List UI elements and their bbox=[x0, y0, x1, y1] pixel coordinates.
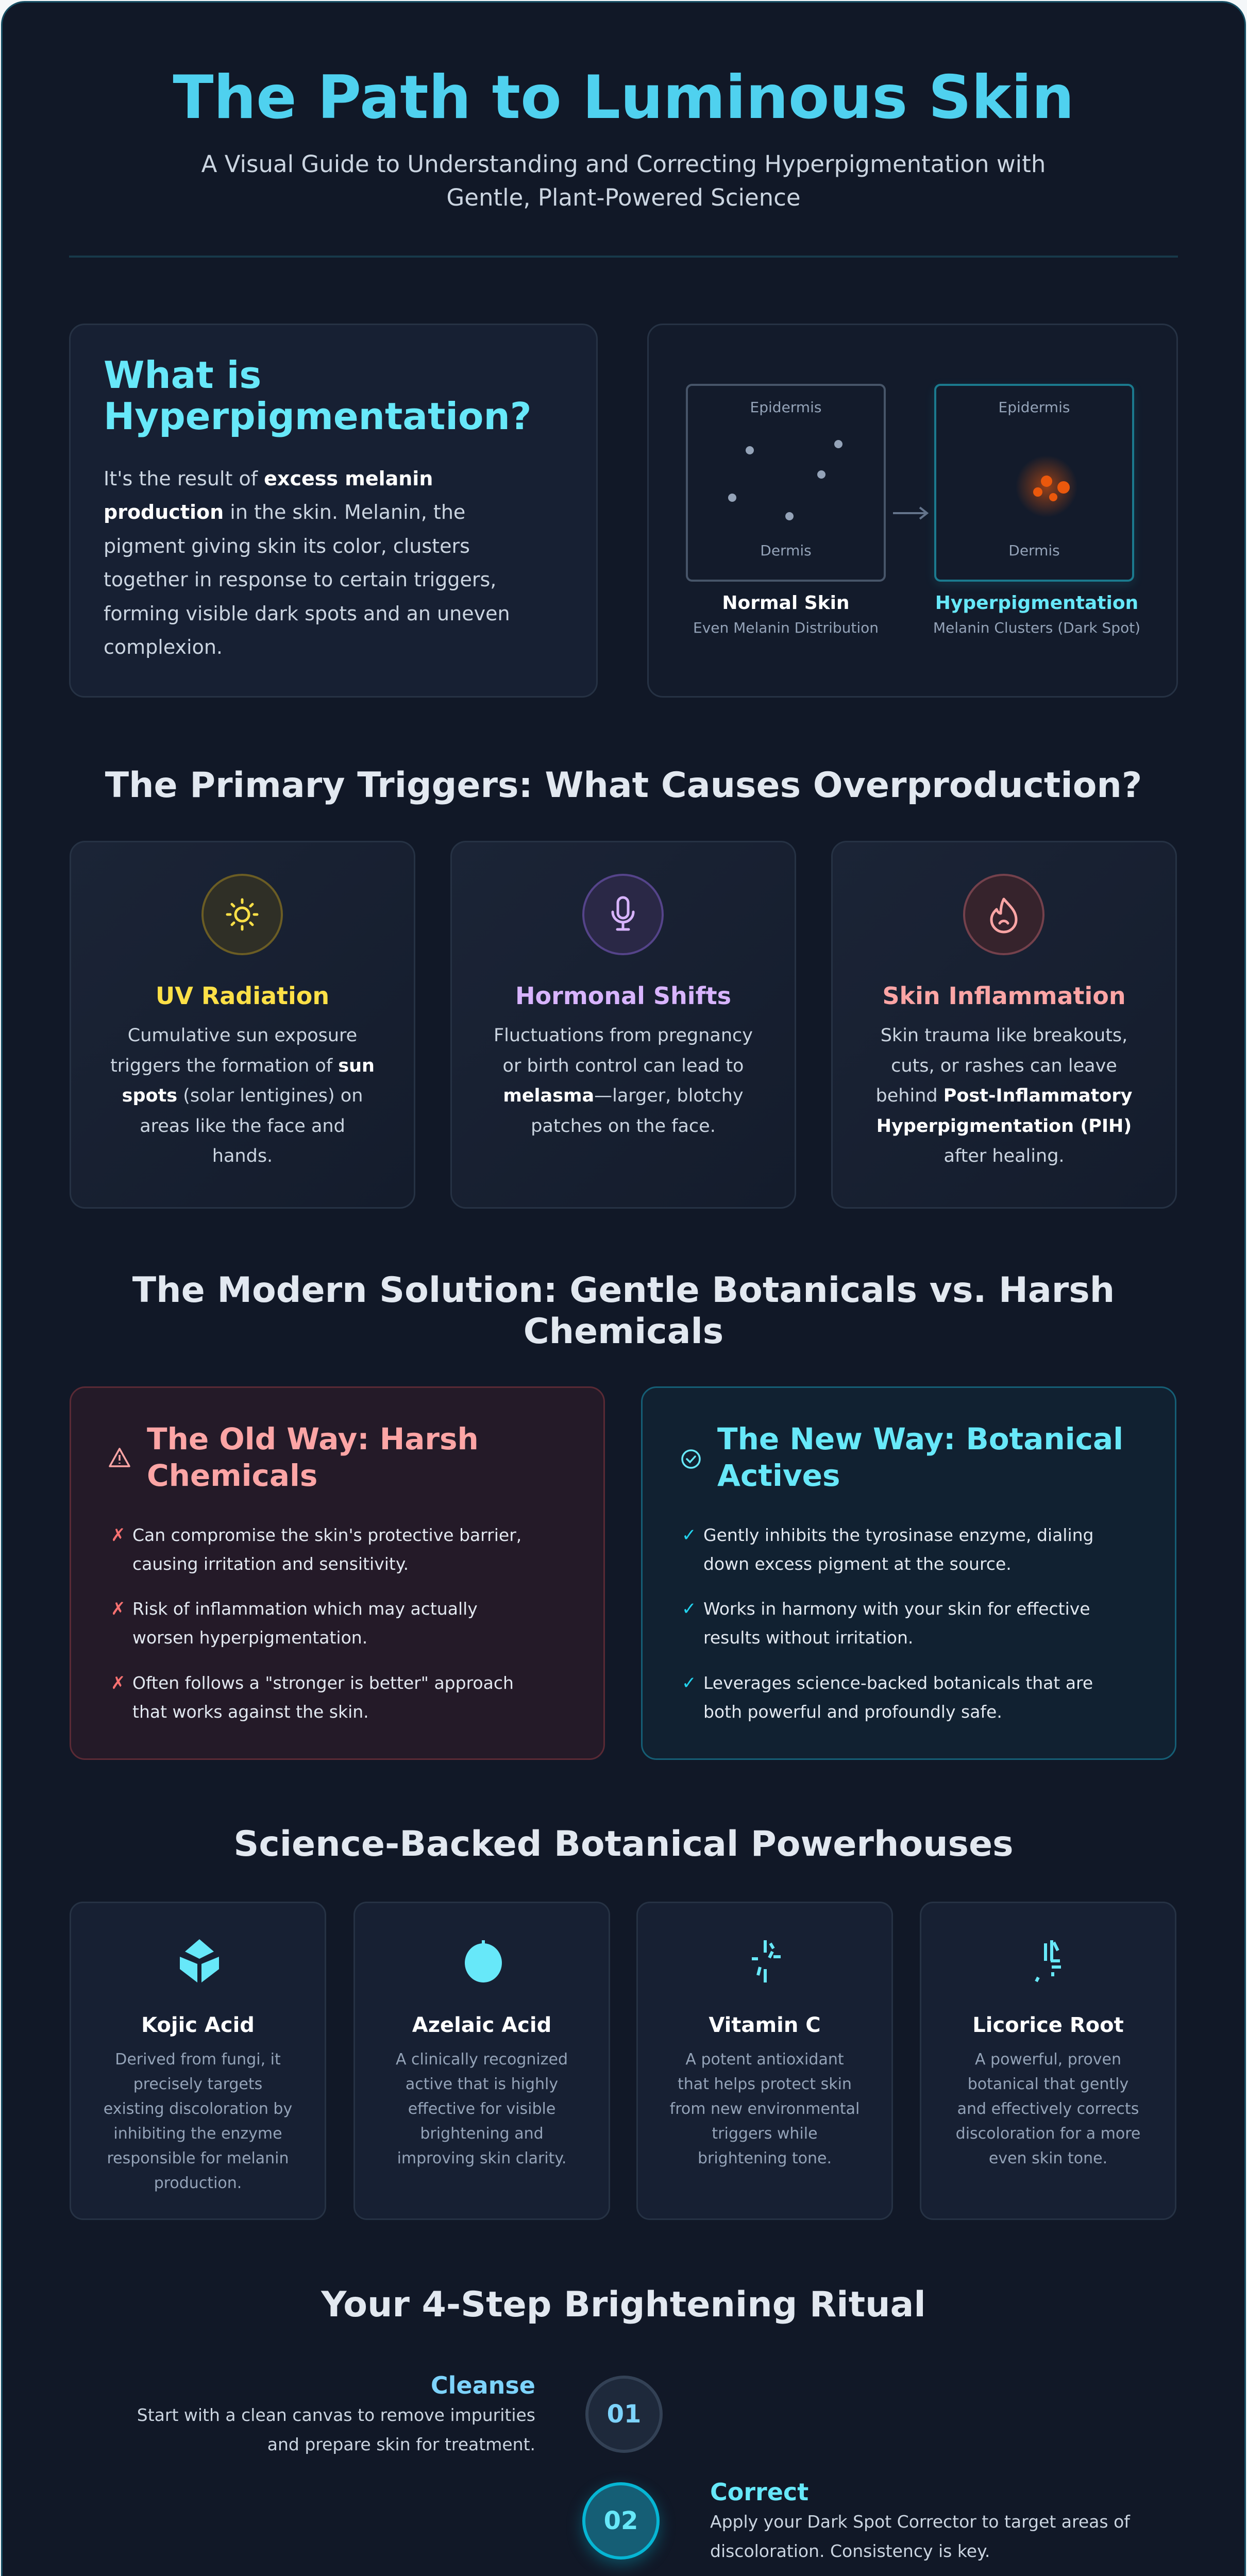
icon: warning bbox=[109, 1448, 130, 1467]
text: precisely targets bbox=[133, 2075, 262, 2093]
text: existing discoloration by bbox=[104, 2100, 292, 2118]
card: azelaic acid bbox=[353, 1902, 610, 2220]
diagram: hyperpigmentation bbox=[934, 384, 1134, 582]
text: melasma—larger, blotchy bbox=[503, 1086, 744, 1106]
bullets: ✗ bbox=[111, 1525, 126, 1546]
subtitle: Gentle, Plant-Powered Science bbox=[446, 184, 801, 211]
subtitle bbox=[201, 150, 1046, 211]
label: hyperpigmentation bbox=[933, 592, 1140, 636]
text bbox=[104, 2050, 292, 2192]
bullets: ✓ bbox=[682, 1599, 697, 1619]
title: UV Radiation bbox=[156, 982, 329, 1010]
bullets: causing irritation and sensitivity. bbox=[132, 1554, 409, 1574]
bullets: Works in harmony with your skin for effective bbox=[703, 1599, 1090, 1619]
icon: microphone bbox=[582, 874, 664, 955]
text: production. bbox=[154, 2174, 242, 2192]
text bbox=[396, 2050, 568, 2167]
bullets: ✓ bbox=[682, 1525, 697, 1546]
heading: botanical powerhouses: Science-Backed Botanical Powerhouses bbox=[233, 1824, 1014, 1865]
label: normal skin: Even Melanin Distribution bbox=[693, 619, 879, 636]
text: triggers the formation of sun bbox=[110, 1056, 375, 1076]
text: A powerful, proven bbox=[975, 2050, 1121, 2069]
icon: sparkle bbox=[752, 1940, 781, 1982]
step 2: correct bbox=[580, 2477, 1177, 2564]
text: definition: production in the skin. Melanin, the bbox=[104, 501, 465, 523]
icon: drop bbox=[465, 1940, 502, 1982]
step 1: cleanse bbox=[52, 2370, 665, 2458]
heading bbox=[147, 1421, 479, 1493]
heading: modern solution: Chemicals bbox=[524, 1311, 723, 1352]
text: active that is highly bbox=[406, 2075, 558, 2093]
text: even skin tone. bbox=[989, 2149, 1107, 2167]
bullets: that works against the skin. bbox=[132, 1702, 369, 1722]
text: effective for visible bbox=[408, 2100, 555, 2118]
text: or birth control can lead to bbox=[503, 1056, 744, 1076]
text: from new environmental bbox=[670, 2100, 860, 2118]
name: Kojic Acid bbox=[141, 2013, 255, 2037]
text: A potent antioxidant bbox=[685, 2050, 844, 2069]
panel: what is hyperpigmentation bbox=[69, 324, 598, 698]
text: areas like the face and bbox=[140, 1116, 345, 1137]
heading: primary triggers: The Primary Triggers: What Causes Overproduction? bbox=[105, 765, 1142, 806]
icon: check circle bbox=[681, 1449, 701, 1469]
label: hyperpigmentation: Hyperpigmentation bbox=[935, 592, 1138, 614]
bullets: Gently inhibits the tyrosinase enzyme, dialing bbox=[703, 1525, 1093, 1545]
text: discoloration for a more bbox=[956, 2125, 1140, 2143]
card: kojic acid bbox=[70, 1902, 326, 2220]
circle 02 bbox=[582, 2482, 660, 2560]
step 1: cleanse: and prepare skin for treatment. bbox=[267, 2434, 535, 2454]
bullets: Leverages science-backed botanicals that are bbox=[703, 1673, 1093, 1693]
diagram: hyperpigmentation: Epidermis bbox=[999, 399, 1070, 416]
title: Hormonal Shifts bbox=[515, 982, 731, 1010]
card: hormonal shifts bbox=[450, 841, 796, 1209]
label: normal skin bbox=[693, 592, 879, 636]
text: Hyperpigmentation (PIH) bbox=[877, 1116, 1132, 1137]
heading: what is: Hyperpigmentation? bbox=[104, 395, 532, 438]
diagram: normal skin: Dermis bbox=[760, 542, 812, 559]
heading: ritual: Your 4-Step Brightening Ritual bbox=[321, 2284, 926, 2325]
step 2: correct: Correct bbox=[710, 2478, 808, 2506]
text bbox=[110, 1025, 375, 1166]
heading bbox=[717, 1421, 1123, 1493]
subtitle: A Visual Guide to Understanding and Correcting Hyperpigmentation with bbox=[201, 150, 1046, 178]
text: definition: complexion. bbox=[104, 636, 223, 658]
bullets: results without irritation. bbox=[703, 1628, 913, 1648]
text bbox=[876, 1025, 1132, 1166]
icon: flame bbox=[963, 874, 1044, 955]
name: Azelaic Acid bbox=[412, 2013, 551, 2037]
text: Fluctuations from pregnancy bbox=[494, 1025, 753, 1046]
text: definition bbox=[104, 467, 510, 658]
heading: what is bbox=[104, 353, 532, 438]
bullets: Risk of inflammation which may actually bbox=[132, 1599, 478, 1619]
label: hyperpigmentation: Melanin Clusters (Dark Spot) bbox=[933, 619, 1140, 636]
panel: skin diagram bbox=[647, 324, 1178, 698]
circle 01: 01 bbox=[607, 2400, 641, 2429]
bullets: ✓ bbox=[682, 1673, 697, 1693]
text: behind Post-Inflammatory bbox=[876, 1086, 1132, 1106]
text: and effectively corrects bbox=[957, 2100, 1139, 2118]
text: Derived from fungi, it bbox=[115, 2050, 281, 2069]
text: improving skin clarity. bbox=[397, 2149, 566, 2167]
circle 02: 02 bbox=[604, 2506, 638, 2535]
text: Cumulative sun exposure bbox=[128, 1025, 357, 1046]
text: that helps protect skin bbox=[678, 2075, 852, 2093]
text: Skin trauma like breakouts, bbox=[881, 1025, 1127, 1046]
panel: new way bbox=[641, 1386, 1176, 1760]
bullets: worsen hyperpigmentation. bbox=[132, 1628, 367, 1648]
text: patches on the face. bbox=[531, 1116, 716, 1137]
text: definition: forming visible dark spots and an uneven bbox=[104, 602, 510, 625]
text: spots (solar lentigines) on bbox=[122, 1086, 363, 1106]
name: Licorice Root bbox=[972, 2013, 1124, 2037]
diagram: normal skin: Epidermis bbox=[750, 399, 821, 416]
text: brightening tone. bbox=[698, 2149, 832, 2167]
heading: Actives bbox=[717, 1458, 840, 1493]
icon: sun bbox=[201, 874, 283, 955]
text bbox=[670, 2050, 860, 2167]
bullets: both powerful and profoundly safe. bbox=[703, 1702, 1002, 1722]
heading: The New Way: Botanical bbox=[717, 1421, 1123, 1456]
heading: modern solution: The Modern Solution: Gentle Botanicals vs. Harsh bbox=[132, 1270, 1115, 1311]
panel: old way bbox=[70, 1386, 605, 1760]
name: Vitamin C bbox=[709, 2013, 821, 2037]
step 1: cleanse: Start with a clean canvas to remove impurities bbox=[137, 2405, 535, 2425]
text bbox=[956, 2050, 1140, 2167]
diagram: hyperpigmentation: Dermis bbox=[1008, 542, 1060, 559]
text: brightening and bbox=[420, 2125, 544, 2143]
title: The Path to Luminous Skin bbox=[173, 63, 1074, 132]
icon: root bbox=[1035, 1940, 1061, 1982]
step 2: correct: Apply your Dark Spot Corrector to target areas of bbox=[710, 2512, 1130, 2532]
label: normal skin: Normal Skin bbox=[722, 592, 850, 614]
bullets bbox=[111, 1525, 521, 1722]
diagram: normal skin bbox=[686, 384, 886, 582]
text: hands. bbox=[212, 1146, 273, 1166]
card: vitamin c bbox=[636, 1902, 893, 2220]
card: licorice root bbox=[920, 1902, 1176, 2220]
bullets: ✗ bbox=[111, 1599, 126, 1619]
heading: The Old Way: Harsh bbox=[147, 1421, 479, 1456]
bullets: down excess pigment at the source. bbox=[703, 1554, 1012, 1574]
heading: Chemicals bbox=[147, 1458, 317, 1493]
text: A clinically recognized bbox=[396, 2050, 568, 2069]
card: skin inflammation bbox=[831, 841, 1177, 1209]
bullets: Can compromise the skin's protective barrier, bbox=[132, 1525, 521, 1545]
text: inhibiting the enzyme bbox=[113, 2125, 282, 2143]
icon: cube bbox=[180, 1939, 219, 1982]
bullets: ✗ bbox=[111, 1673, 126, 1693]
text: triggers while bbox=[712, 2125, 818, 2143]
bullets: Often follows a "stronger is better" approach bbox=[132, 1673, 514, 1693]
arrow bbox=[893, 507, 929, 519]
text: cuts, or rashes can leave bbox=[891, 1056, 1117, 1076]
text bbox=[494, 1025, 753, 1137]
step 1: cleanse: Cleanse bbox=[431, 2371, 535, 2399]
text: definition: together in response to certain triggers, bbox=[104, 568, 496, 591]
text: after healing. bbox=[943, 1146, 1065, 1166]
text: definition: pigment giving skin its color, clusters bbox=[104, 535, 470, 557]
text: responsible for melanin bbox=[107, 2149, 289, 2167]
step 2: correct: discoloration. Consistency is key. bbox=[710, 2541, 990, 2561]
circle 01 bbox=[585, 2376, 663, 2453]
heading: modern solution bbox=[132, 1270, 1115, 1352]
card: uv radiation bbox=[70, 841, 415, 1209]
title: Skin Inflammation bbox=[882, 982, 1126, 1010]
heading: what is: What is bbox=[104, 353, 261, 397]
text: botanical that gently bbox=[968, 2075, 1128, 2093]
text: definition: It's the result of excess melanin bbox=[104, 467, 433, 490]
bullets bbox=[682, 1525, 1093, 1722]
